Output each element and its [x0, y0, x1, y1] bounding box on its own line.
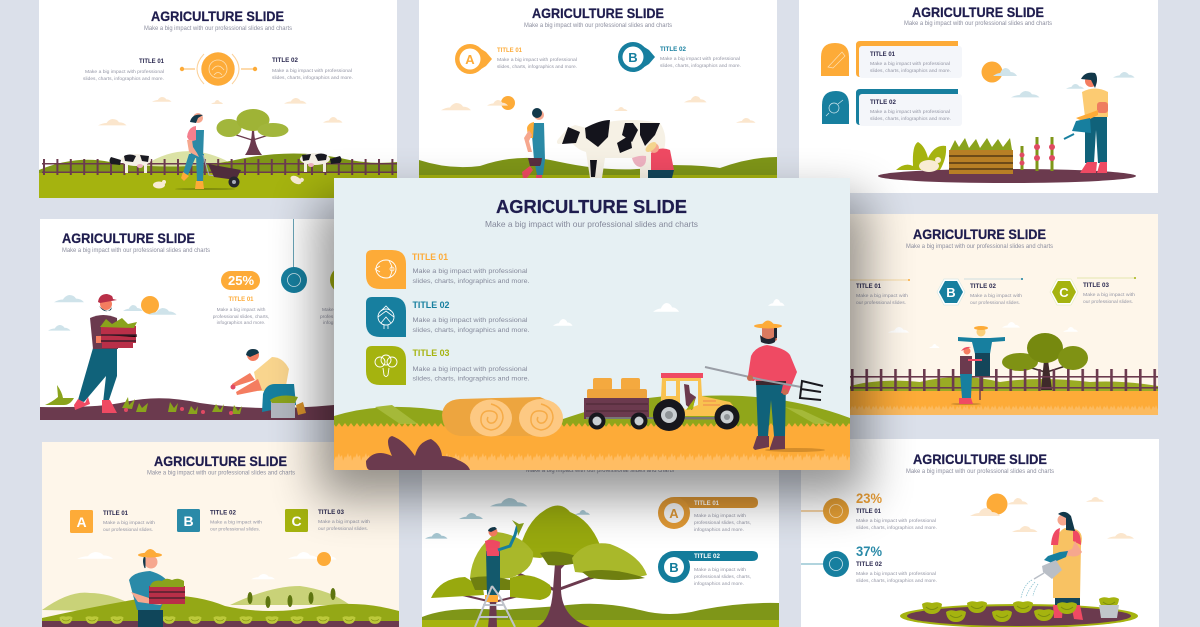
text block: title 03: TITLE 03 [318, 509, 344, 516]
large tree [505, 505, 647, 627]
callout B: TITLE 02 [694, 553, 720, 560]
icon: orange grapefruit tile [366, 250, 406, 289]
raised bed [949, 138, 1013, 174]
text block: title 01: Make a big impact with professional [497, 57, 577, 63]
pill: 25% [221, 271, 260, 290]
stat: 23%: 23% [856, 491, 882, 506]
text block: title 01: slides, charts, infographics and more. [412, 278, 530, 285]
woman with wheelbarrow [175, 113, 241, 190]
callout B [658, 551, 758, 587]
icon: hanging teal circle [281, 219, 307, 293]
subheading: Make a big impact with our professional slides and charts [906, 469, 1054, 475]
text block: title 03 [318, 509, 370, 532]
text block: title 03: our professional slides. [318, 526, 368, 532]
shadow of centre slide [318, 198, 866, 498]
stat: 23% [801, 491, 937, 531]
man kneeling at radish [230, 349, 306, 418]
gardener on ladder [475, 520, 524, 627]
heading: AGRICULTURE SLIDE [496, 197, 687, 217]
text block: title 02: Make a big impact with [970, 293, 1022, 299]
stat: 37%: Make a big impact with professional [856, 571, 936, 577]
fence [850, 369, 1158, 392]
slide: bottom right, percentages with woman [801, 439, 1159, 627]
text block: title 01: Make a big impact with [103, 520, 155, 526]
badge B [177, 509, 200, 532]
text block: title 02: our professional slides. [970, 300, 1020, 306]
card: title 01: Make a big impact with professional [870, 61, 950, 67]
sun and clouds [970, 494, 1134, 539]
slide: bottom left, square badges with farmer [42, 442, 399, 627]
text block: title 02: TITLE 02 [660, 46, 686, 53]
card: title 01 [856, 41, 962, 78]
badge: hexagon B: B [946, 285, 956, 300]
soil [878, 169, 1136, 183]
text block: title 01: slides, charts, infographics and more. [497, 64, 577, 70]
text block: title 01: TITLE 01 [497, 47, 522, 54]
stat: 37% [801, 544, 937, 584]
callout B: B [669, 560, 679, 575]
radishes [124, 407, 233, 415]
text block: title 03: TITLE 03 [412, 348, 450, 359]
badge A [70, 510, 93, 533]
clouds [553, 299, 784, 326]
callout A [658, 497, 758, 533]
text block: title 02: Make a big impact with professional [272, 68, 352, 74]
text block: title 01 [213, 297, 269, 326]
slide: bottom centre, tree with ladder [422, 460, 779, 627]
heading: AGRICULTURE SLIDE [62, 231, 195, 246]
soil bed [40, 398, 334, 420]
badge C [285, 509, 308, 532]
ground strip [419, 175, 777, 178]
text block: title 03 [1077, 277, 1136, 305]
badge: hexagon C [1050, 279, 1078, 305]
icon: hanging green circle [330, 267, 356, 293]
tree [216, 109, 288, 155]
clouds [888, 322, 1078, 348]
lettuce row [60, 616, 382, 624]
text block: title 01 [103, 510, 155, 533]
subheading: Make a big impact with our professional slides and charts [485, 219, 698, 229]
gardener with watering can [1064, 73, 1108, 173]
text block: title 02: Make a big impact with professional [660, 56, 740, 62]
slide: middle right, hexagons with scarecrow [845, 214, 1158, 415]
text block: title 02: slides, charts, infographics and more. [660, 63, 741, 69]
bush and chicken [896, 142, 946, 172]
cows [110, 153, 342, 173]
text block: title 03: our professional slides. [1083, 299, 1133, 305]
text block: title 01: our professional slides. [103, 527, 153, 533]
hills [422, 603, 779, 627]
heading: AGRICULTURE SLIDE [154, 454, 287, 469]
subheading: Make a big impact with our professional slides and charts [524, 23, 672, 29]
text block: title 01 [412, 252, 530, 285]
icon: carrot tab [821, 43, 849, 76]
seedlings [1020, 137, 1055, 171]
subheading: Make a big impact with our professional slides and charts [144, 26, 292, 32]
heading: AGRICULTURE SLIDE [532, 6, 664, 21]
slide: top left, two titles around cabbage icon [39, 0, 397, 198]
tree [1002, 333, 1088, 390]
stat: 23%: slides, charts, infographics and more. [856, 525, 937, 531]
callout B: Make a big impact with [694, 567, 746, 573]
text fragment: partly covered description: profes [320, 314, 334, 320]
trailer with hay [584, 378, 660, 430]
card: title 02: TITLE 02 [870, 99, 896, 106]
farmer holding crate [129, 549, 185, 627]
text fragment: partly covered description [320, 307, 334, 326]
text block: title 01: TITLE 01 [139, 58, 164, 65]
hills [39, 151, 397, 173]
slide: middle left, 25% with farmers [40, 219, 356, 420]
heading: AGRICULTURE SLIDE [912, 5, 1044, 20]
text block: title 01 [850, 279, 910, 306]
panel: centre slide [334, 178, 850, 470]
ground [334, 423, 850, 470]
callout A: infographics and more. [694, 527, 744, 533]
text block: title 02: Make a big impact with professional [412, 317, 528, 324]
text block: title 01: TITLE 01 [412, 252, 449, 263]
badge: hexagon B [937, 279, 965, 305]
text block: title 03: slides, charts, infographics and more. [412, 376, 530, 382]
badge B: B [183, 513, 194, 529]
icon: teal artichoke tile [366, 297, 406, 337]
badge A: A [76, 514, 87, 530]
man milking cow [646, 142, 674, 178]
badge A [455, 44, 492, 74]
bucket of lettuce [1099, 597, 1119, 618]
subheading: Make a big impact with our professional slides and charts [147, 470, 295, 476]
stat: 23%: Make a big impact with professional [856, 518, 936, 524]
chickens [153, 176, 304, 188]
text block: title 03: Make a big impact with [318, 519, 370, 525]
icon: green cauliflower tile [366, 346, 406, 385]
card: title 01: slides, charts, infographics and more. [870, 68, 951, 74]
text block: title 01: Make a big impact with [856, 293, 908, 299]
hills [42, 586, 399, 627]
cypress trees [248, 588, 336, 608]
text block: title 02 [964, 278, 1023, 306]
lettuces [922, 601, 1077, 622]
stat: 23%: TITLE 01 [856, 508, 881, 515]
badge C: C [291, 513, 302, 529]
callout A: professional slides, charts, [694, 520, 751, 526]
text block: title 02 [660, 46, 741, 69]
hills [419, 157, 777, 175]
grass strip [850, 405, 1158, 415]
callout A: TITLE 01 [694, 500, 719, 507]
hay bales [442, 397, 563, 437]
text block: title 02: slides, charts, infographics and more. [272, 75, 353, 81]
stat: 37%: 37% [856, 544, 882, 559]
text block: title 02: our professional slides. [210, 526, 260, 532]
sun and clouds [77, 552, 336, 579]
ground [39, 173, 397, 198]
clouds [98, 97, 342, 125]
text block: title 01 [497, 47, 577, 70]
text fragment: partly covered description: Make [322, 307, 334, 313]
callout A: A [669, 506, 679, 521]
sun and clouds [982, 62, 1135, 97]
text block: title 01: TITLE 01 [856, 283, 881, 290]
callout A: Make a big impact with [694, 513, 746, 519]
badge B: B [628, 50, 638, 65]
heading: AGRICULTURE SLIDE [151, 9, 284, 24]
ground [422, 620, 779, 627]
text block: title 01: TITLE 01 [103, 510, 128, 517]
woman watering [1021, 512, 1083, 620]
card: title 02: slides, charts, infographics and more. [870, 116, 951, 122]
soil band [42, 621, 399, 627]
subheading: Make a big impact with our professional slides and charts [906, 244, 1053, 250]
card: title 02 [856, 89, 962, 126]
stat: 37%: slides, charts, infographics and more. [856, 578, 937, 584]
text block: title 01: professional slides, charts, [213, 314, 269, 320]
heading: AGRICULTURE SLIDE [913, 227, 1046, 242]
icon: orange cabbage circle with connectors [180, 52, 257, 86]
subheading: Make a big impact with our professional slides and charts [526, 468, 674, 474]
text block: title 01: Make a big impact with [217, 307, 266, 313]
pill: 25%: 25% [228, 273, 254, 288]
text block: title 03 [412, 348, 530, 382]
text block: title 01: slides, charts, infographics and more. [83, 76, 164, 82]
woman with bucket [522, 108, 545, 178]
text block: title 01: TITLE 01 [228, 297, 254, 303]
text block: title 01: infographics and more. [217, 320, 265, 326]
text block: title 03: Make a big impact with professional [412, 366, 528, 373]
scarecrow [958, 326, 1005, 400]
sun and clouds [441, 96, 756, 123]
text block: title 02: TITLE 02 [970, 283, 996, 290]
text fragment: partly covered description: infog [323, 320, 334, 326]
hills [850, 377, 1158, 392]
text block: title 03: Make a big impact with [1083, 292, 1135, 298]
text block: title 02: slides, charts, infographics and more. [412, 327, 530, 334]
clouds [425, 498, 590, 539]
text block: title 02: TITLE 02 [412, 300, 450, 311]
text block: title 02 [272, 57, 353, 81]
small tree [431, 532, 551, 627]
fence [42, 159, 397, 175]
icon: radish tab [822, 91, 849, 124]
cow [557, 120, 665, 178]
badge A: A [465, 52, 475, 67]
text block: title 01: our professional slides. [856, 300, 906, 306]
grass strip [334, 452, 850, 470]
badge B [618, 42, 655, 72]
subheading: Make a big impact with our professional slides and charts [62, 248, 210, 254]
garden bed [900, 604, 1138, 627]
farmer carrying crate [74, 294, 137, 413]
text block: title 03: TITLE 03 [1083, 282, 1109, 289]
ground [850, 391, 1158, 415]
subheading: Make a big impact with our professional slides and charts [904, 21, 1052, 27]
seedlings [45, 385, 242, 414]
shrub [366, 436, 470, 470]
slide: top right, cards with gardener [799, 0, 1158, 193]
stat: 37%: TITLE 02 [856, 561, 882, 568]
text block: title 02: Make a big impact with [210, 520, 262, 526]
heading: AGRICULTURE SLIDE [913, 452, 1047, 467]
farmer in red cap [951, 347, 982, 405]
text block: title 02 [412, 300, 530, 334]
text block: title 02: TITLE 02 [210, 510, 236, 516]
sun and clouds [48, 295, 176, 331]
card: title 01: TITLE 01 [870, 51, 895, 58]
card: title 02: Make a big impact with professional [870, 109, 950, 115]
slide: top centre, A/B badges with cow [419, 0, 777, 190]
callout B: infographics and more. [694, 581, 744, 587]
badge: hexagon C: C [1059, 285, 1069, 300]
text block: title 01: Make a big impact with professional [85, 69, 164, 75]
text block: title 02 [210, 510, 262, 532]
farmer with pitchfork [705, 320, 825, 452]
tractor [653, 373, 740, 431]
callout B: professional slides, charts, [694, 574, 751, 580]
text block: title 01: Make a big impact with professional [412, 268, 528, 275]
text block: title 01 [83, 58, 164, 82]
text block: title 02: TITLE 02 [272, 57, 298, 64]
hills [334, 395, 850, 430]
